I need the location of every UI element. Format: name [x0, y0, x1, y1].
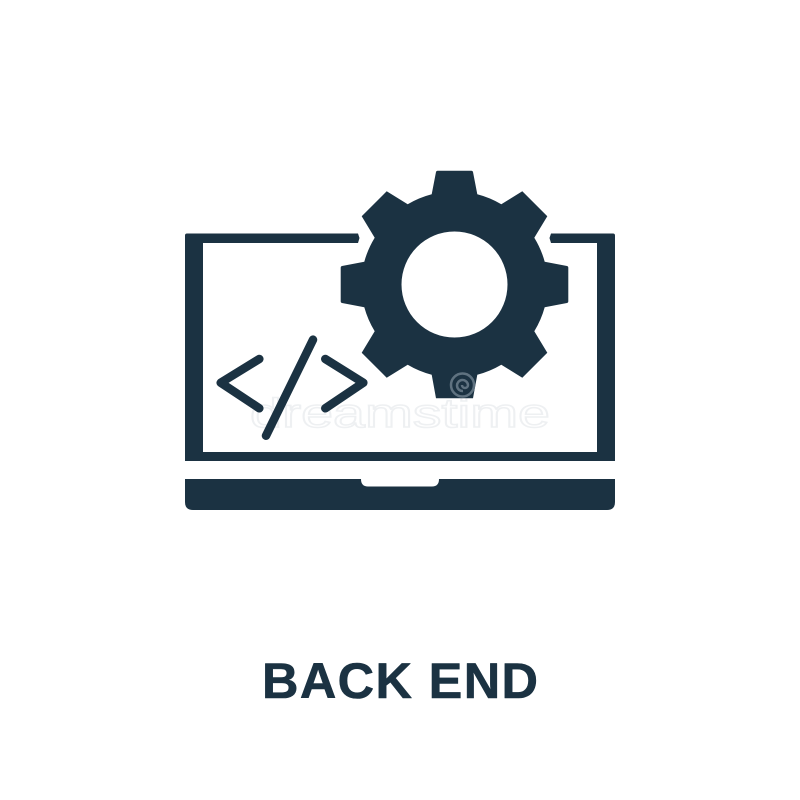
- right angle bracket: [325, 359, 363, 408]
- icon: laptop: [185, 234, 615, 510]
- watermark text: dreamstime: [250, 390, 550, 436]
- icon: code brackets: [221, 340, 363, 436]
- watermark spiral: [451, 374, 474, 396]
- icon: gear: [341, 171, 568, 398]
- forward slash: [266, 340, 313, 436]
- left angle bracket: [221, 359, 259, 408]
- laptop base with notch: [185, 479, 615, 510]
- title: BACK END: [262, 652, 538, 709]
- laptop screen frame: [185, 234, 615, 461]
